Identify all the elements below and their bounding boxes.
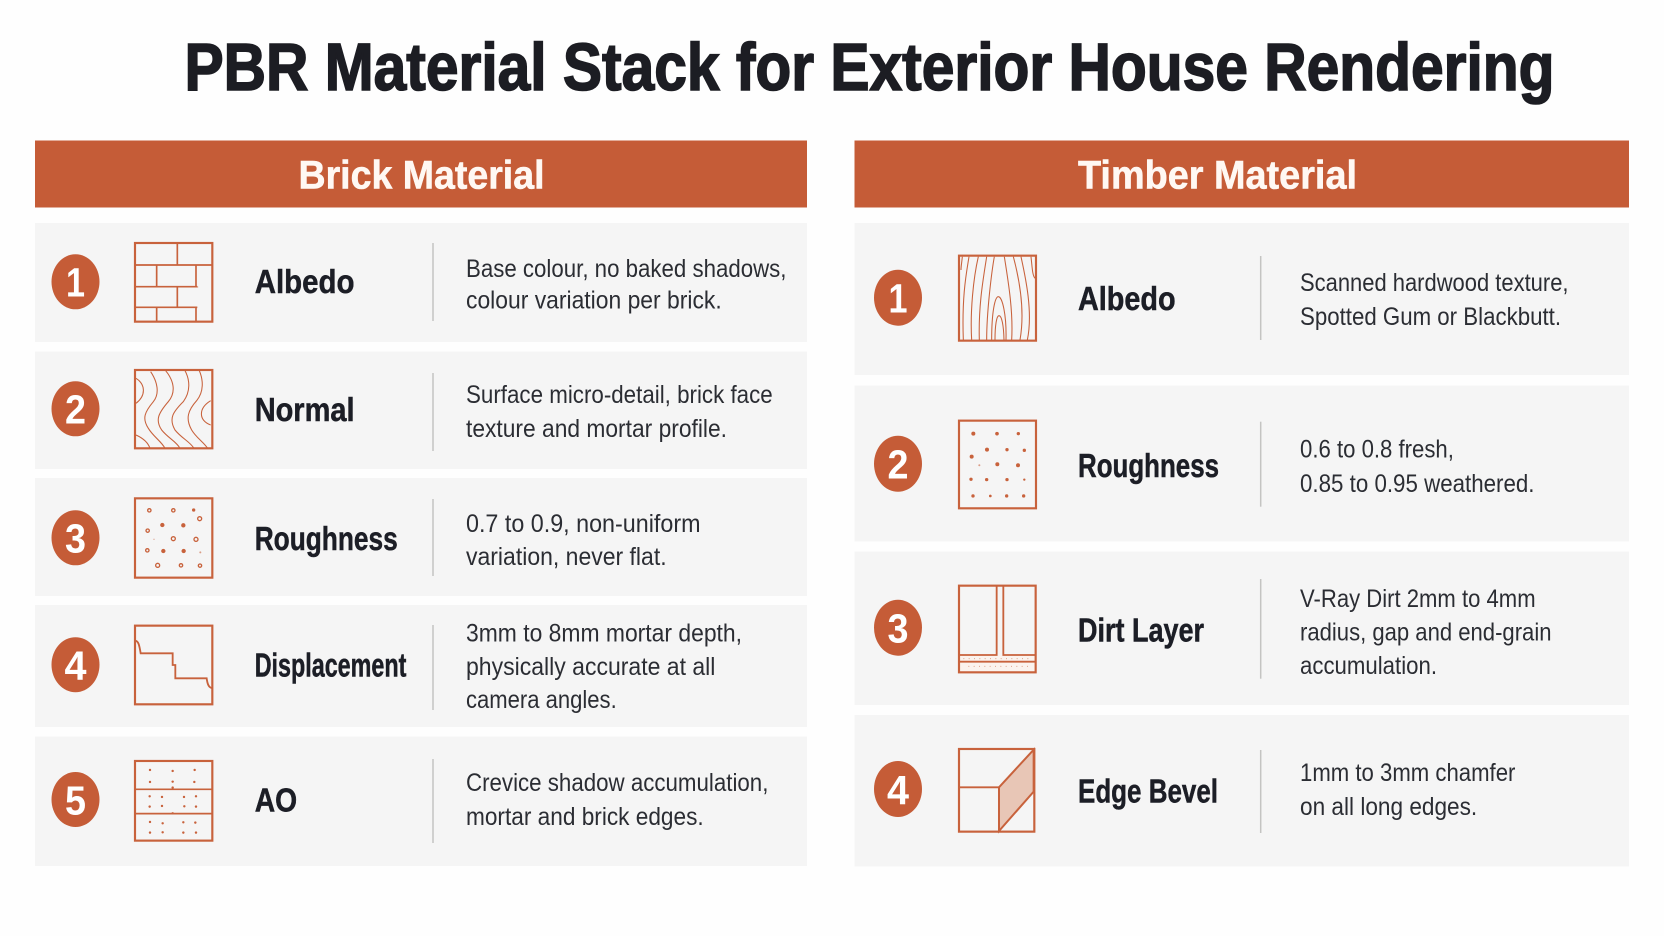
panel: brick material xyxy=(35,140,807,866)
row: brick albedo: Albedo xyxy=(255,264,354,301)
description: texture and mortar profile. xyxy=(466,415,727,443)
icon: wavy normal lines xyxy=(135,370,212,448)
row: brick roughness: Roughness xyxy=(255,521,398,558)
icon: ambient occlusion grid xyxy=(135,761,212,841)
number badge 4: 4 xyxy=(887,767,909,813)
description: 0.7 to 0.9, non-uniform xyxy=(466,510,700,538)
description: 0.6 to 0.8 fresh, xyxy=(1300,436,1454,464)
icon: brick pattern xyxy=(135,243,212,322)
panel: timber material xyxy=(854,140,1629,866)
description: Base colour, no baked shadows, xyxy=(466,255,786,283)
row: timber albedo xyxy=(854,223,1629,375)
heading: timber material: Timber Material xyxy=(1078,154,1357,198)
description xyxy=(1300,759,1515,821)
row: timber edge bevel xyxy=(854,715,1629,866)
icon: wood grain xyxy=(959,256,1036,341)
number badge 3: 3 xyxy=(888,606,908,652)
number badge 2 xyxy=(52,381,100,436)
row: brick roughness xyxy=(35,478,807,596)
row: timber roughness xyxy=(854,386,1629,542)
description: on all long edges. xyxy=(1300,793,1477,821)
number badge 1 xyxy=(52,254,100,309)
row: timber dirt layer xyxy=(854,552,1629,705)
number badge 1 xyxy=(874,270,922,326)
description: Spotted Gum or Blackbutt. xyxy=(1300,303,1561,331)
row: brick normal: Normal xyxy=(255,392,354,429)
row: brick displacement: Displacement xyxy=(255,648,406,685)
number badge 4: 4 xyxy=(64,642,87,688)
icon: displacement profile xyxy=(135,626,212,704)
number badge 3 xyxy=(52,510,100,565)
number badge 3: 3 xyxy=(65,516,86,562)
description: Surface micro-detail, brick face xyxy=(466,381,773,409)
description xyxy=(466,255,786,314)
description xyxy=(1300,436,1534,498)
description xyxy=(466,381,773,443)
description: Scanned hardwood texture, xyxy=(1300,269,1568,297)
heading: brick material: Brick Material xyxy=(298,154,544,198)
number badge 1: 1 xyxy=(66,260,85,306)
icon: dirt in plank gap xyxy=(959,586,1036,672)
description: colour variation per brick. xyxy=(466,286,722,314)
icon: edge bevel chamfer xyxy=(959,749,1034,832)
row: brick AO: AO xyxy=(255,783,297,820)
description: camera angles. xyxy=(466,686,617,714)
number badge 1: 1 xyxy=(888,276,908,322)
heading: brick material xyxy=(35,140,807,208)
description: physically accurate at all xyxy=(466,653,715,681)
row: timber dirt layer: Dirt Layer xyxy=(1078,613,1204,650)
number badge 4 xyxy=(874,761,922,817)
row: brick displacement xyxy=(35,605,807,727)
description: variation, never flat. xyxy=(466,543,667,571)
number badge 3 xyxy=(874,600,922,656)
row: brick AO xyxy=(35,736,807,866)
row: brick normal xyxy=(35,352,807,469)
row: timber edge bevel: Edge Bevel xyxy=(1078,774,1218,811)
icon: roughness speckles xyxy=(135,498,212,578)
number badge 5: 5 xyxy=(65,778,86,824)
row: timber albedo: Albedo xyxy=(1078,281,1176,318)
description: accumulation. xyxy=(1300,652,1437,680)
row: timber roughness: Roughness xyxy=(1078,448,1219,485)
description: 1mm to 3mm chamfer xyxy=(1300,759,1515,787)
description: mortar and brick edges. xyxy=(466,803,704,831)
number badge 5 xyxy=(52,772,100,827)
description: 3mm to 8mm mortar depth, xyxy=(466,620,742,648)
description: radius, gap and end-grain xyxy=(1300,619,1552,647)
number badge 2: 2 xyxy=(888,442,908,488)
description: 0.85 to 0.95 weathered. xyxy=(1300,470,1534,498)
icon: roughness dots xyxy=(959,421,1036,508)
description xyxy=(466,769,768,831)
number badge 2: 2 xyxy=(65,386,86,432)
description: Crevice shadow accumulation, xyxy=(466,769,768,797)
number badge 2 xyxy=(874,436,922,492)
description: V-Ray Dirt 2mm to 4mm xyxy=(1300,585,1536,613)
description xyxy=(1300,585,1552,680)
heading: timber material xyxy=(854,140,1629,208)
description xyxy=(466,620,742,714)
description xyxy=(466,510,700,571)
number badge 4 xyxy=(52,637,100,692)
description xyxy=(1300,269,1568,331)
row: brick albedo xyxy=(35,223,807,342)
